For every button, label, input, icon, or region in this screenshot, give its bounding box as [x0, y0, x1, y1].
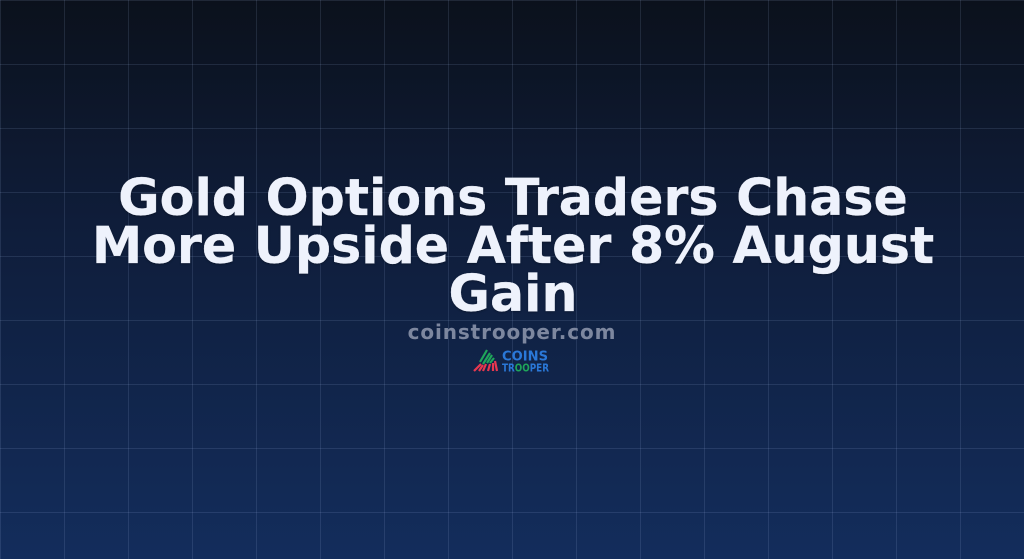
title: Gain: [448, 264, 578, 323]
icon: coinstrooper logo: COINS: [502, 348, 548, 364]
title: [92, 168, 934, 323]
icon: coinstrooper logo: TROOPER: [502, 362, 549, 374]
icon: coinstrooper logo: [473, 348, 549, 374]
website label: coinstrooper.com: [408, 320, 616, 344]
title: More Upside After 8% August: [92, 216, 934, 275]
title: Gold Options Traders Chase: [118, 168, 908, 227]
